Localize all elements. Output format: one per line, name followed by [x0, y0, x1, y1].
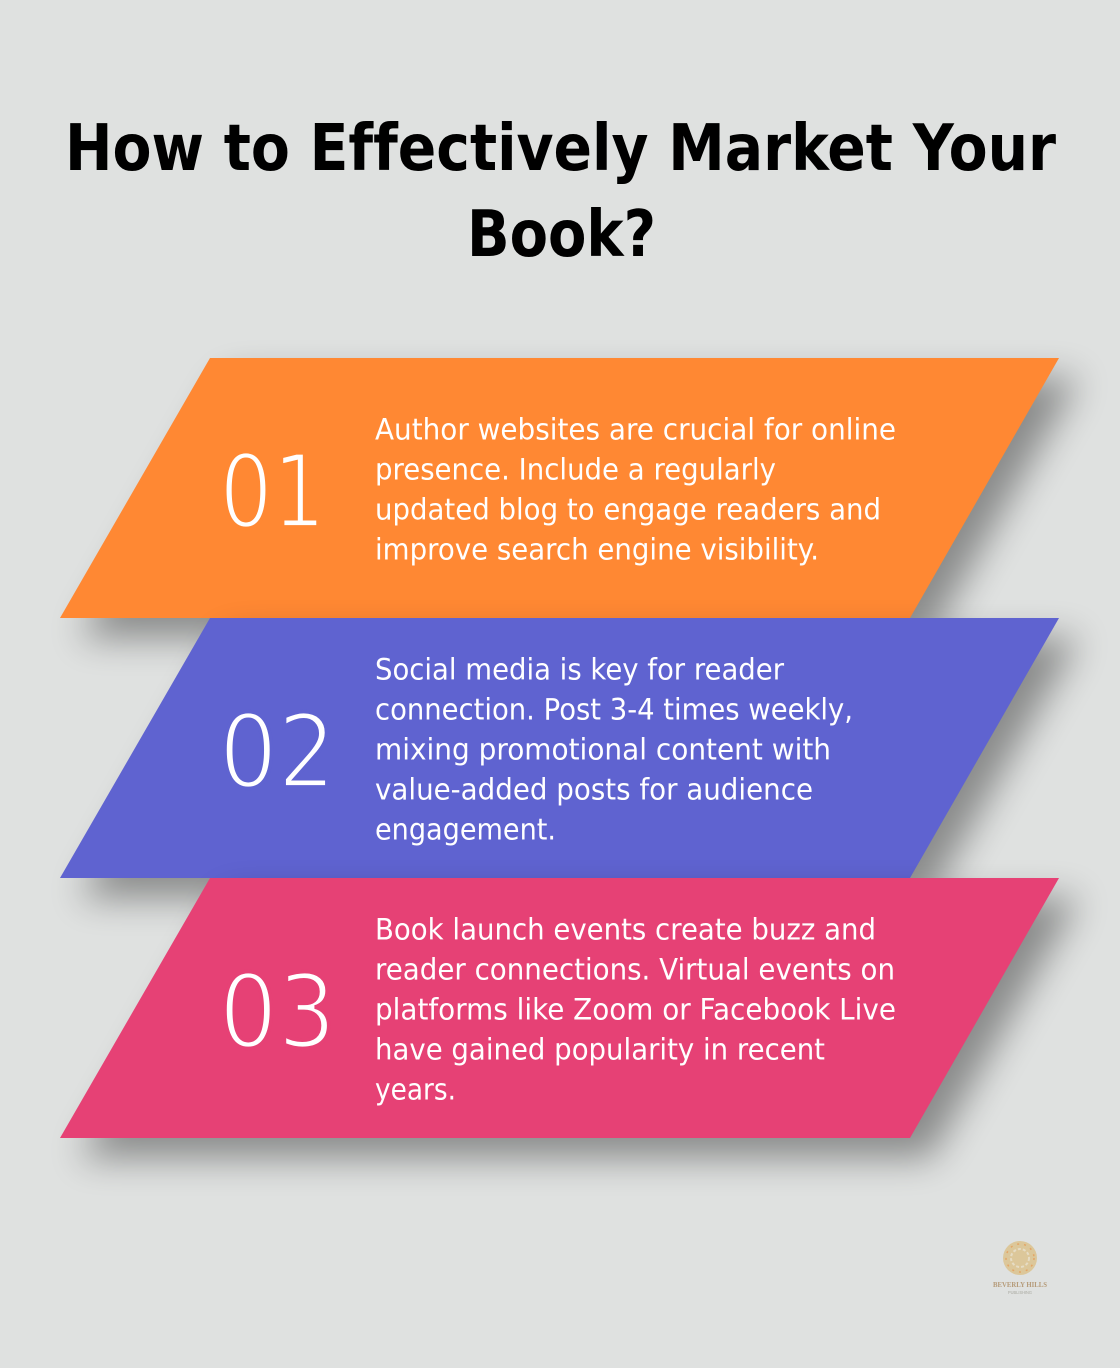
text block: step 03: years. [375, 1072, 456, 1106]
text block: step 03 [375, 912, 896, 1106]
text block: step 03: Book launch events create buzz and [375, 912, 876, 946]
number 03: 03 [219, 953, 336, 1072]
text block: step 02: mixing promotional content with [375, 732, 831, 766]
title: Book? [467, 198, 656, 272]
panel: step 01 orange [60, 358, 1079, 638]
text block: step 01: improve search engine visibility. [375, 532, 819, 566]
text block: step 03: reader connections. Virtual events on [375, 952, 895, 986]
panel: step 03 pink [60, 878, 1079, 1158]
number 01: 01 [220, 433, 326, 552]
text block: step 02 [375, 652, 853, 846]
number 02: 02 [219, 693, 336, 812]
text block: step 02: engagement. [375, 812, 556, 846]
title [65, 112, 1056, 272]
logo: Beverly Hills Publishing [993, 1241, 1047, 1295]
logo: Beverly Hills Publishing: BEVERLY HILLS [993, 1281, 1047, 1289]
text block: step 03: have gained popularity in recent [375, 1032, 825, 1066]
text block: step 01: presence. Include a regularly [375, 452, 776, 486]
logo: Beverly Hills Publishing: PUBLISHING [1008, 1290, 1032, 1295]
text block: step 02: value-added posts for audience [375, 772, 813, 806]
text block: step 01 [375, 412, 896, 566]
text block: step 01: updated blog to engage readers and [375, 492, 881, 526]
text block: step 01: Author websites are crucial for online [375, 412, 896, 446]
text block: step 02: Social media is key for reader [375, 652, 784, 686]
text block: step 03: platforms like Zoom or Facebook Live [375, 992, 896, 1026]
panel: step 02 purple [60, 618, 1079, 898]
text block: step 02: connection. Post 3-4 times weekly, [375, 692, 853, 726]
